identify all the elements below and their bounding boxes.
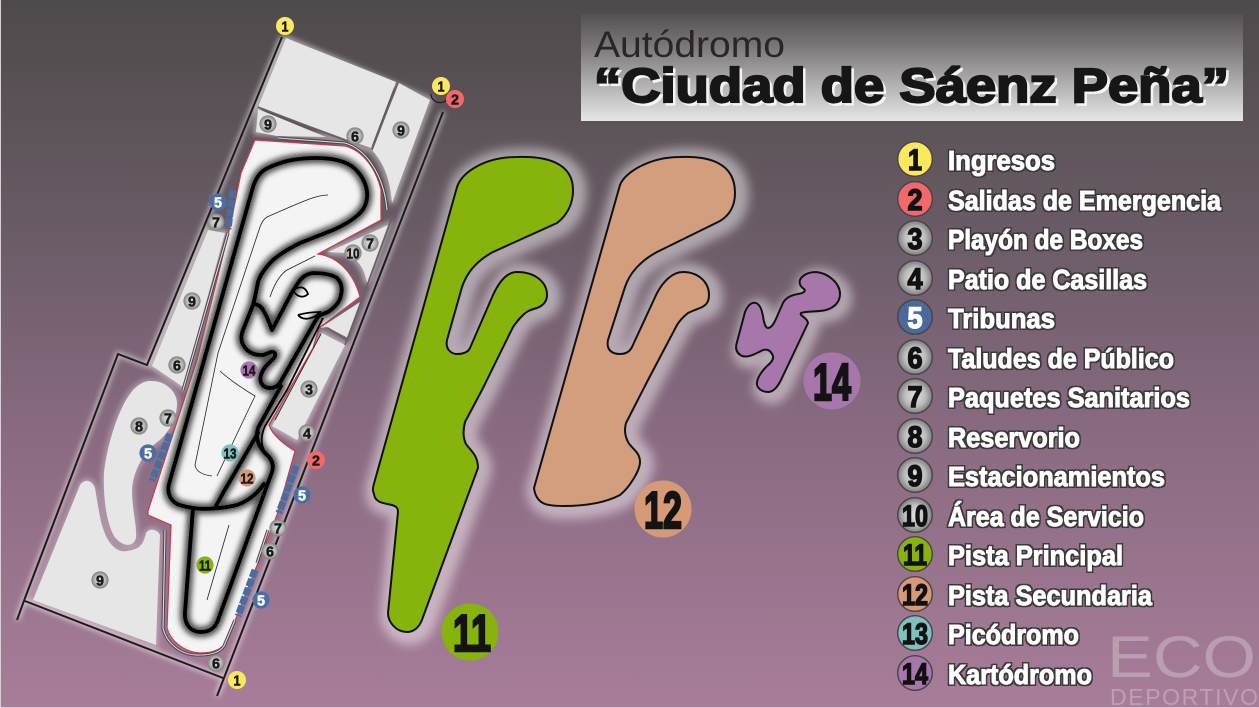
badge 12: [634, 480, 692, 540]
marker: stands: 5: [257, 592, 265, 610]
marker: grey facilities: 6: [212, 656, 220, 672]
title line 2: “Ciudad de Sáenz Peña”: [594, 60, 1229, 113]
track silhouette: [534, 157, 735, 506]
legend item 10: [898, 498, 1144, 533]
watermark logo: ECO: [1107, 625, 1256, 690]
marker: grey facilities: 9: [96, 572, 104, 590]
map markers: [91, 17, 464, 690]
legend: [898, 142, 1221, 691]
spectator embankments: [163, 138, 387, 655]
marker: tracks: [196, 361, 258, 574]
legend item 4: Patio de Casillas: [948, 264, 1147, 295]
marker: grey facilities: 7: [366, 236, 374, 252]
parking and service blocks: [33, 38, 430, 645]
marker: grey facilities: 3: [305, 382, 313, 398]
legend item 8: 8: [908, 421, 922, 454]
track silhouette: [373, 157, 573, 632]
legend item 5: 5: [908, 302, 922, 335]
legend item 3: Playón de Boxes: [948, 224, 1143, 255]
separators between blocks: [258, 82, 398, 345]
marker: emergency exits: [307, 90, 464, 470]
marker: tracks: 13: [224, 446, 236, 462]
badge 11: 11: [453, 605, 491, 663]
panel: kart track shape 14: [736, 272, 860, 412]
track silhouette: [736, 272, 840, 392]
marker: grey facilities: 8: [135, 418, 143, 436]
legend item 12: Pista Secundaria: [948, 580, 1152, 611]
legend item 5: [898, 300, 1055, 335]
marker: grey facilities: 9: [188, 294, 196, 310]
legend item 2: 2: [908, 184, 922, 217]
marker: tracks: 12: [240, 470, 254, 488]
marker: tracks: 11: [199, 558, 211, 574]
legend item 11: 11: [903, 539, 927, 572]
badge 12: 12: [644, 482, 682, 540]
legend item 6: Taludes de Público: [948, 343, 1174, 374]
title panel: [581, 14, 1243, 121]
legend item 8: Reservorio: [948, 422, 1080, 453]
perimeter walls: [17, 37, 443, 696]
marker: grey facilities: 7: [212, 214, 220, 232]
gate arc at north entrance: [431, 94, 447, 103]
legend item 7: [898, 379, 1190, 414]
panel: main track shape 11: [373, 157, 576, 663]
marker: grey facilities: 4: [303, 426, 312, 442]
legend item 14: [898, 656, 1092, 691]
marker: grey facilities: [91, 115, 410, 672]
legend item 4: 4: [908, 263, 923, 296]
title line 1: Autódromo: [594, 24, 785, 65]
panel: secondary track shape 12: [534, 157, 738, 540]
legend item 3: [898, 221, 1143, 256]
marker: entrances: 1: [282, 18, 288, 36]
pit lane and service thin lines: [195, 195, 328, 600]
legend item 7: 7: [908, 381, 922, 414]
legend item 11: [898, 537, 1123, 572]
race track: main circuit, secondary and kart loops: [168, 158, 367, 632]
marker: stands: 5: [298, 488, 306, 504]
legend item 2: [898, 182, 1221, 217]
infield: track area with red border: [148, 140, 381, 653]
site outer glow: [17, 37, 443, 696]
legend item 13: 13: [902, 618, 928, 651]
legend item 2: Salidas de Emergencia: [948, 185, 1221, 216]
legend item 5: Tribunas: [948, 303, 1055, 334]
legend item 9: 9: [908, 460, 922, 493]
marker: stands: [139, 193, 311, 610]
panel: circuit site map: [17, 17, 464, 696]
marker: grey facilities: 6: [351, 128, 359, 146]
legend item 1: 1: [908, 144, 922, 177]
grandstands: [152, 190, 296, 616]
legend item 11: Pista Principal: [948, 540, 1123, 571]
legend item 10: 10: [902, 500, 928, 533]
marker: stands: 5: [214, 194, 222, 212]
legend item 12: 12: [902, 579, 928, 612]
legend item 12: [898, 577, 1152, 612]
marker: grey facilities: 9: [397, 122, 405, 140]
legend item 13: [898, 616, 1079, 651]
legend item 14: 14: [902, 658, 928, 691]
marker: emergency exits: 2: [451, 92, 459, 108]
legend item 4: [898, 261, 1147, 296]
badge 14: 14: [813, 354, 851, 412]
marker: grey facilities: 6: [173, 358, 181, 374]
legend item 6: 6: [908, 342, 922, 375]
legend item 6: [898, 340, 1174, 375]
legend item 1: Ingresos: [948, 145, 1055, 176]
marker: tracks: 14: [242, 362, 256, 380]
legend item 9: Estacionamientos: [948, 461, 1165, 492]
marker: grey facilities: 7: [274, 520, 282, 538]
legend item 8: [898, 419, 1080, 454]
legend item 3: 3: [908, 223, 922, 256]
track shading: [168, 158, 367, 632]
legend item 7: Paquetes Sanitarios: [948, 382, 1190, 413]
legend item 1: [898, 142, 1055, 177]
marker: entrances: 1: [438, 78, 444, 96]
marker: entrances: 1: [234, 672, 240, 690]
marker: grey facilities: 6: [266, 544, 274, 560]
marker: entrances: [228, 17, 450, 690]
badge 11: [442, 604, 498, 663]
marker: stands: 5: [144, 446, 152, 462]
marker: grey facilities: 7: [164, 410, 172, 428]
legend item 14: Kartódromo: [948, 659, 1092, 690]
marker: grey facilities: 9: [264, 116, 272, 134]
legend item 9: [898, 458, 1165, 493]
marker: emergency exits: 2: [312, 452, 320, 470]
marker: grey facilities: 10: [346, 246, 360, 262]
legend item 13: Picódromo: [948, 619, 1079, 650]
watermark logo: [1107, 625, 1258, 708]
legend item 10: Área de Servicio: [948, 501, 1144, 532]
